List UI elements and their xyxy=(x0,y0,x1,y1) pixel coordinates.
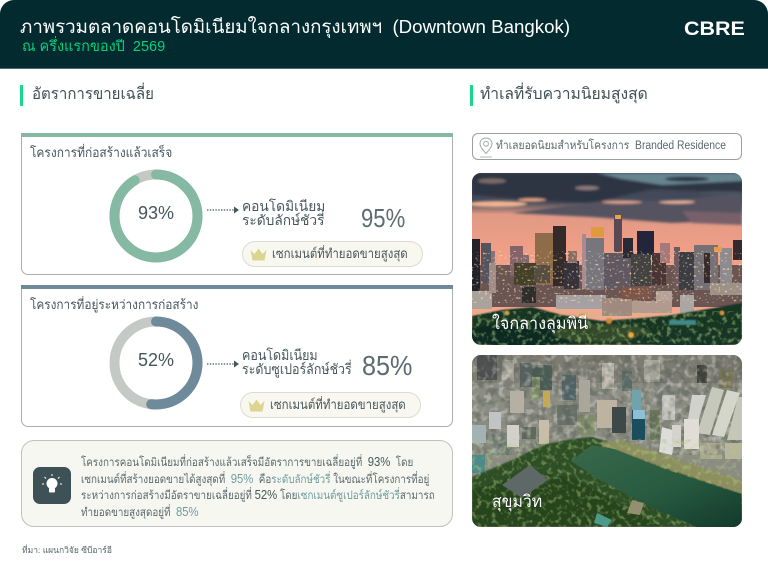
callout: summary xyxy=(21,440,453,527)
segment label: คอนโดมิเนียม xyxy=(242,198,325,214)
panel heading: โครงการที่ก่อสร้างแล้วเสร็จ xyxy=(30,145,172,160)
arrow xyxy=(207,360,239,368)
panel heading: โครงการที่อยู่ระหว่างการก่อสร้าง xyxy=(30,297,198,312)
segment label xyxy=(242,347,352,378)
icon: light bulb xyxy=(33,467,71,504)
foreground towers xyxy=(472,380,742,473)
header banner xyxy=(0,0,768,69)
arrow xyxy=(207,206,239,214)
CBRE logo: CBRE xyxy=(684,19,745,40)
segment label xyxy=(242,198,325,228)
top segment badge xyxy=(242,241,423,267)
summary text: ทำยอดขายสูงสุดอยู่ที่ 85% xyxy=(81,504,199,518)
skyline xyxy=(472,215,742,316)
segment label: คอนโดมิเนียม xyxy=(242,347,318,363)
summary text xyxy=(81,454,435,519)
section heading: average sales rate: อัตราการขายเฉลี่ย xyxy=(32,86,154,103)
section heading: average sales rate xyxy=(20,82,154,106)
source note: ที่มา: แผนกวิจัย ซีบีอาร์อี xyxy=(22,545,112,555)
icon: crown xyxy=(248,400,264,412)
photo: Sukhumvit aerial xyxy=(472,355,742,527)
panel: under-construction projects xyxy=(21,285,453,427)
title: ภาพรวมตลาดคอนโดมิเนียมใจกลางกรุงเทพฯ (Downtown Bangkok) xyxy=(20,16,570,37)
icon: crown xyxy=(250,248,266,260)
top segment badge xyxy=(240,392,421,418)
city texture xyxy=(472,355,742,455)
summary text: โครงการคอนโดมิเนียมที่ก่อสร้างแล้วเสร็จมีอัตราการขายเฉลี่ยอยู่ที่ 93% โดย xyxy=(81,454,413,469)
summary text: ระหว่างการก่อสร้างมีอัตราขายเฉลี่ยอยู่ที่ 52% โดยเซกเมนต์ซูเปอร์ลักษ์ชัวรี่สามารถ xyxy=(81,487,435,502)
photo label: ใจกลางลุมพินี xyxy=(492,314,588,333)
subtitle: ณ ครึ่งแรกของปี 2569 xyxy=(22,39,165,55)
location tag text: ทำเลยอดนิยมสำหรับโครงการ Branded Residence xyxy=(496,140,726,152)
segment value: 85% xyxy=(362,350,412,381)
section heading: popular locations xyxy=(470,82,648,106)
badge text: เซกเมนต์ที่ทำยอดขายสูงสุด xyxy=(270,397,406,412)
segment value: 95% xyxy=(361,203,405,233)
city blocks xyxy=(472,355,742,459)
park xyxy=(472,437,742,527)
badge text: เซกเมนต์ที่ทำยอดขายสูงสุด xyxy=(272,246,408,261)
donut chart 52% xyxy=(110,316,202,410)
panel: completed projects xyxy=(21,133,453,275)
photo: Lumphini skyline xyxy=(472,173,742,345)
photo label: สุขุมวิท xyxy=(492,492,542,511)
plaza xyxy=(502,465,548,498)
segment label: ระดับซูเปอร์ลักษ์ชัวรี่ xyxy=(242,361,352,377)
donut chart 93%: 93% xyxy=(138,203,174,223)
location tag: branded residence xyxy=(472,133,742,160)
donut chart 52%: 52% xyxy=(138,350,174,370)
park trees xyxy=(462,303,752,347)
segment label: ระดับลักษ์ชัวรี่ xyxy=(242,212,325,228)
clouds xyxy=(467,173,744,225)
donut chart 93% xyxy=(110,170,202,262)
icon: map pin xyxy=(480,138,492,158)
summary text: เซกเมนต์ที่สร้างยอดขายได้สูงสุดที่ 95% คือระดับลักษ์ชัวรี่ ในขณะที่โครงการที่อยู่ xyxy=(81,470,429,486)
lake xyxy=(571,445,742,527)
section heading: popular locations: ทำเลที่รับความนิยมสูงสุด xyxy=(480,86,648,103)
window lights xyxy=(472,251,742,303)
